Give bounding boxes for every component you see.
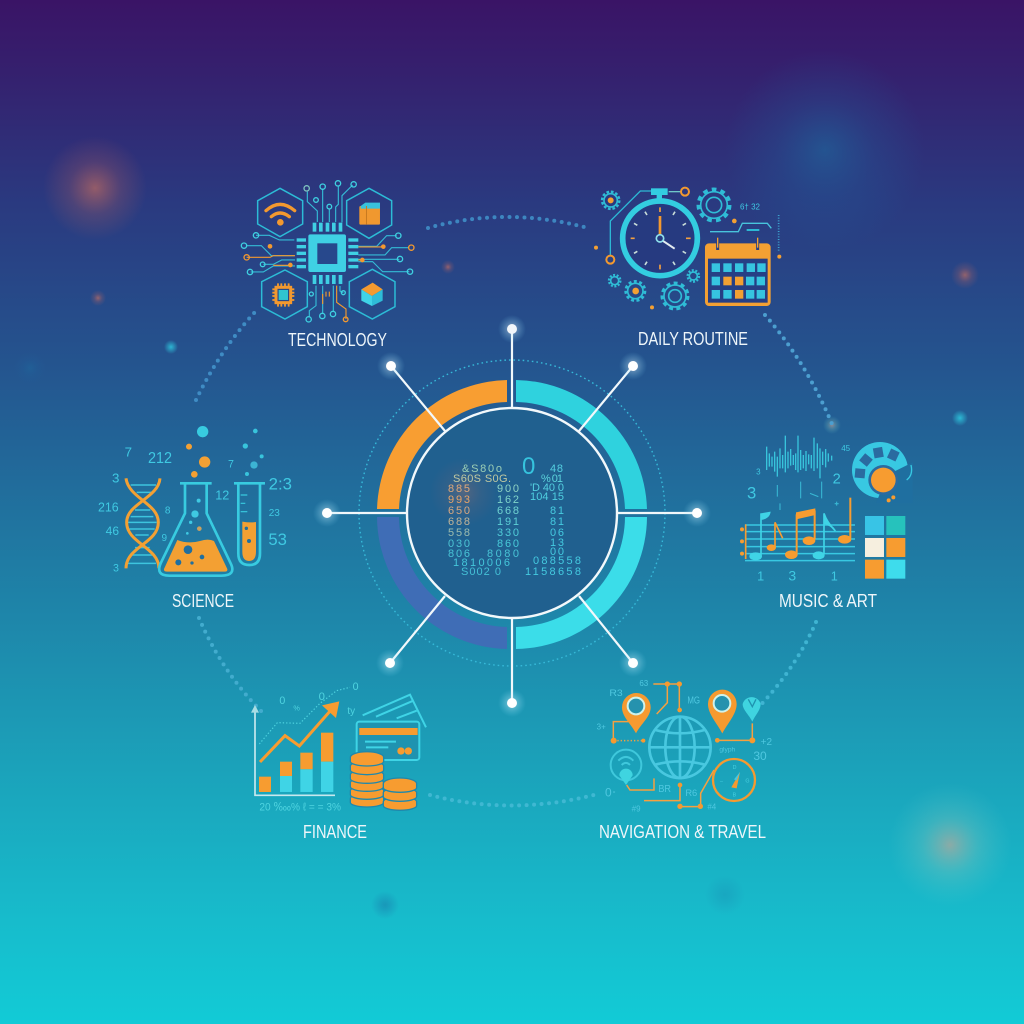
numbers: ty [347, 706, 355, 717]
numbers: 0 [319, 691, 325, 703]
connector traces [610, 191, 779, 256]
numbers: 53 [268, 530, 287, 549]
gears [602, 189, 730, 309]
numbers: 8 [165, 505, 171, 516]
numbers: 2 [833, 471, 841, 487]
hexagon icons [258, 188, 395, 319]
label: SCIENCE [172, 591, 234, 611]
numbers: 212 [148, 450, 172, 467]
icon: microchip with circuits [241, 181, 414, 322]
central diagram [313, 315, 711, 717]
color palette [865, 516, 905, 579]
map pins [622, 690, 761, 733]
numbers: 1 [757, 569, 764, 583]
numbers: 1 [831, 569, 838, 583]
binary digits 0 and 1: 81 [550, 505, 564, 517]
compass [713, 759, 755, 801]
binary digits 0 and 1: 885 [448, 483, 470, 495]
binary digits 0 and 1: 0 [522, 453, 535, 480]
cyan arc segment [516, 517, 647, 649]
panel: science [98, 426, 292, 611]
numbers: 3 [747, 483, 756, 502]
connector lines [327, 329, 697, 703]
inner dotted ring [359, 360, 665, 666]
staff and notes [740, 498, 855, 561]
icon: globe, map pins and compass [597, 679, 772, 814]
icon: small chip [272, 283, 294, 307]
binary digits 0 and 1: % 01 [541, 473, 563, 485]
label: DAILY ROUTINE [638, 329, 748, 349]
bubbles [186, 426, 264, 478]
binary digits 0 and 1: 030 [448, 538, 470, 550]
stopwatch [623, 188, 697, 276]
binary digits 0 and 1: 06 [550, 527, 564, 539]
label: FINANCE [303, 822, 367, 842]
numbers: +2 [761, 737, 772, 748]
panel: technology [241, 181, 414, 350]
numbers: #9 [632, 805, 641, 814]
binary digits 0 and 1: 668 [497, 505, 519, 517]
binary digits 0 and 1: 558 [448, 527, 470, 539]
compass: B [733, 793, 737, 799]
dna helix [126, 478, 160, 568]
numbers [259, 681, 359, 814]
numbers: % [293, 704, 300, 713]
binary digits 0 and 1: 900 [497, 483, 519, 495]
axes [251, 705, 335, 795]
numbers [597, 679, 772, 814]
teal arc segment [516, 380, 647, 509]
growth arrow [260, 701, 339, 762]
numbers: 45 [841, 444, 851, 453]
icon: dna, flask and test tube [98, 426, 292, 576]
small marks: 6† 32 [740, 202, 761, 211]
bars [259, 733, 333, 792]
credit cards [357, 695, 426, 760]
numbers: 23 [269, 508, 280, 519]
panel: finance [251, 681, 426, 842]
numbers: R6 [685, 788, 697, 798]
compass: D [733, 765, 737, 771]
binary digits 0 and 1: &S80o [462, 463, 502, 475]
binary digits 0 and 1: 191 [497, 516, 519, 528]
binary digits 0 and 1: 'D 40 0 [530, 482, 564, 494]
numbers: #4 [707, 802, 717, 811]
binary digits 0 and 1 [448, 453, 581, 578]
numbers: 3 [112, 470, 119, 485]
numbers: 7 [228, 458, 234, 470]
panel: navigation and travel [597, 679, 772, 842]
numbers: 3 [113, 563, 119, 575]
numbers: 12 [215, 489, 229, 503]
waveform [767, 436, 832, 478]
binary digits 0 and 1: S002 0 [461, 566, 501, 578]
panel: daily routine [594, 188, 781, 349]
chip body [308, 234, 346, 272]
outer dotted ring [196, 217, 832, 806]
numbers: 20 ‱% ℓ = = 3% [259, 802, 341, 814]
globe [649, 717, 711, 778]
numbers: 0 [353, 681, 359, 693]
test tube [234, 483, 265, 565]
numbers: 2:3 [269, 475, 292, 494]
label: MUSIC & ART [779, 591, 877, 611]
node dots [313, 315, 711, 717]
compass: G [745, 778, 749, 784]
numbers: 63 [639, 679, 649, 688]
center circle [407, 408, 617, 618]
binary digits 0 and 1: 330 [497, 527, 519, 539]
binary digits 0 and 1: 650 [448, 505, 470, 517]
numbers: MG [687, 695, 700, 706]
numbers: 30 [753, 749, 767, 763]
calendar [705, 238, 771, 306]
binary digits 0 and 1: 162 [497, 494, 519, 506]
blue arc segment [377, 517, 507, 649]
route lines [613, 684, 752, 807]
dotted trend [259, 687, 350, 744]
numbers: R3 [609, 688, 623, 698]
numbers: 0 [605, 786, 612, 800]
chip pins [297, 223, 358, 284]
binary digits 0 and 1: 860 [497, 538, 519, 550]
warm glow behind digits [430, 458, 498, 526]
numbers: 3 [788, 567, 796, 583]
numbers: 46 [106, 524, 119, 538]
numbers: 216 [98, 501, 119, 515]
compass: – [720, 778, 723, 784]
label: NAVIGATION & TRAVEL [599, 822, 766, 842]
icon: location with wifi [611, 750, 641, 785]
binary digits 0 and 1: 81 [550, 516, 564, 528]
orange arc segment [377, 380, 507, 509]
binary digits 0 and 1: 1810006 [453, 557, 510, 569]
icon: blue cube [361, 283, 383, 306]
numbers [747, 444, 851, 583]
numbers: 3+ [597, 722, 606, 731]
dial [852, 442, 913, 503]
binary digits 0 and 1: 1158658 [525, 566, 581, 578]
icon: wifi [266, 204, 295, 224]
numbers [98, 444, 292, 575]
binary digits 0 and 1: 806 [448, 548, 470, 560]
numbers: 0 [279, 695, 285, 707]
flask [159, 483, 232, 576]
binary digits 0 and 1: S60S S0G. [453, 473, 511, 485]
icon: waveform, notes, dial and palette [740, 436, 913, 583]
numbers: 3 [756, 467, 761, 476]
binary digits 0 and 1: 993 [448, 494, 470, 506]
label: TECHNOLOGY [288, 330, 387, 350]
numbers: 9 [162, 533, 168, 544]
icon: bar chart, credit cards and coins [251, 681, 426, 814]
binary digits 0 and 1: 8080 [487, 548, 519, 560]
numbers: glyph [719, 747, 736, 754]
icon: orange cube [359, 203, 380, 225]
numbers: BR [658, 784, 671, 795]
numbers: 7 [125, 444, 132, 459]
circuit traces [247, 185, 409, 317]
binary digits 0 and 1: 13 [550, 537, 564, 549]
numbers: ° [613, 789, 616, 798]
binary digits 0 and 1: 104 15 [530, 491, 564, 503]
binary digits 0 and 1: 688 [448, 516, 470, 528]
coin stacks [350, 752, 417, 810]
binary digits 0 and 1: 00 [550, 546, 564, 558]
panel: music and art [740, 436, 913, 611]
icon: stopwatch, gears and calendar [594, 188, 781, 309]
binary digits 0 and 1: 088558 [533, 555, 581, 567]
binary digits 0 and 1: 4 8 [550, 463, 563, 475]
